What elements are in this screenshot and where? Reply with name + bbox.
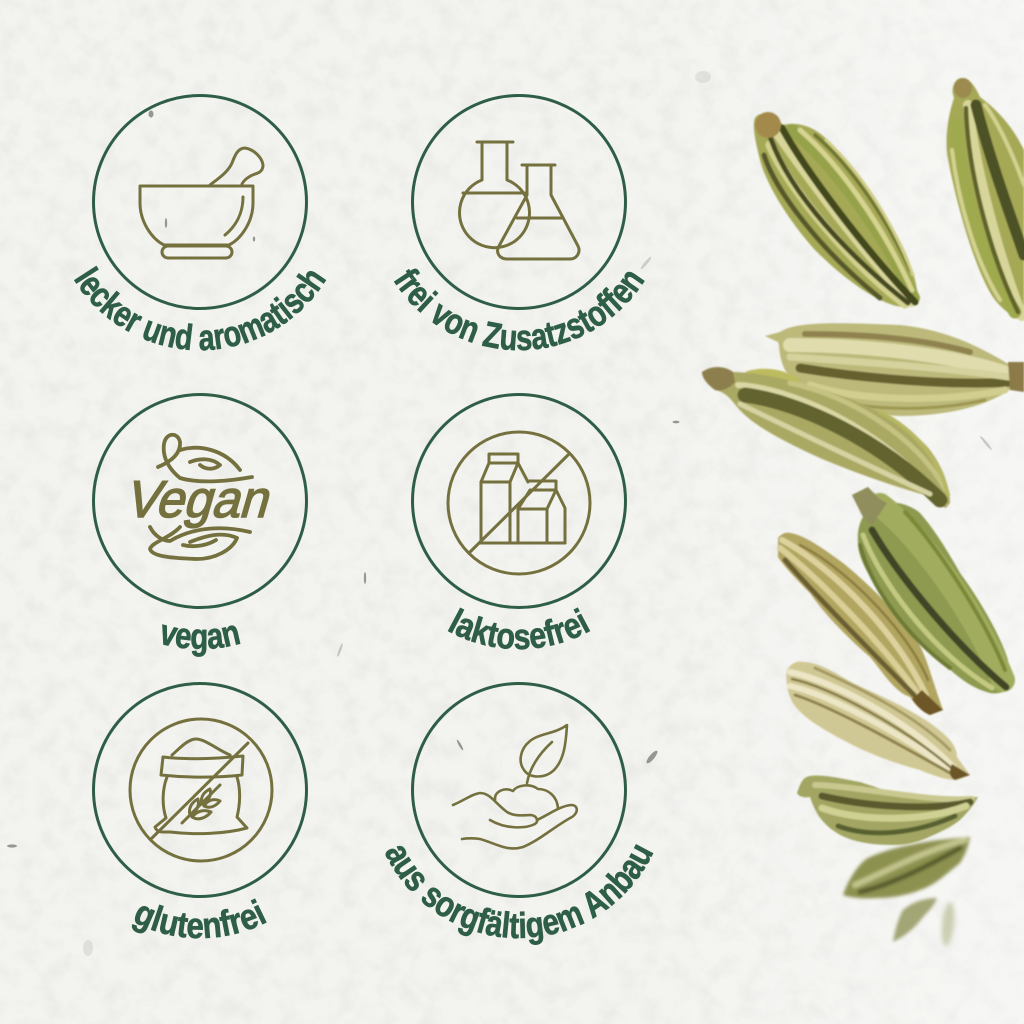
label: glutenfrei (132, 898, 267, 939)
panel: laktosefrei (411, 393, 627, 650)
icon: hand holding seedling (453, 725, 577, 848)
panel: vegan (92, 393, 308, 692)
script word: Vegan (121, 471, 279, 529)
seed: faint blurred (940, 901, 956, 947)
label: lecker und aromatisch (74, 266, 326, 351)
icon: crossed-out milk cartons (448, 432, 590, 574)
badge ring (412, 394, 626, 608)
seed: large green (852, 487, 1009, 693)
ornament: upper leaf (158, 435, 252, 481)
badge ring (412, 684, 626, 896)
icon: mortar and pestle (140, 148, 263, 258)
seed: tan slender (778, 533, 943, 715)
icon: laboratory flasks (460, 142, 579, 259)
panel: glutenfrei (92, 682, 308, 939)
badge ring (94, 96, 306, 308)
panel: aus sorgfältigem Anbau (386, 682, 654, 945)
label: laktosefrei (448, 607, 590, 650)
icon: crossed-out flour sack (130, 719, 272, 861)
badge ring (412, 96, 626, 308)
seed: upper left (754, 112, 918, 307)
seed: pale horizontal (765, 323, 1024, 416)
fennel seeds column (702, 78, 1024, 947)
seed: blurred (843, 837, 970, 898)
label: aus sorgfältigem Anbau (386, 844, 654, 945)
seed: pale ribbed (786, 662, 970, 780)
panel: frei von Zusatzstoffen (394, 94, 645, 351)
ornament: lower leaf (150, 527, 250, 559)
icon: vegan lettering with leaves (121, 435, 279, 559)
label: vegan (162, 624, 240, 657)
seed: curved green (797, 775, 978, 845)
seed: banana shaped (702, 367, 950, 508)
panel: lecker und aromatisch (74, 94, 326, 351)
badge ring (94, 684, 306, 896)
badge ring (94, 394, 306, 608)
label: frei von Zusatzstoffen (394, 268, 645, 351)
seed: upper right (947, 78, 1024, 320)
seed: blurred small (893, 898, 937, 942)
